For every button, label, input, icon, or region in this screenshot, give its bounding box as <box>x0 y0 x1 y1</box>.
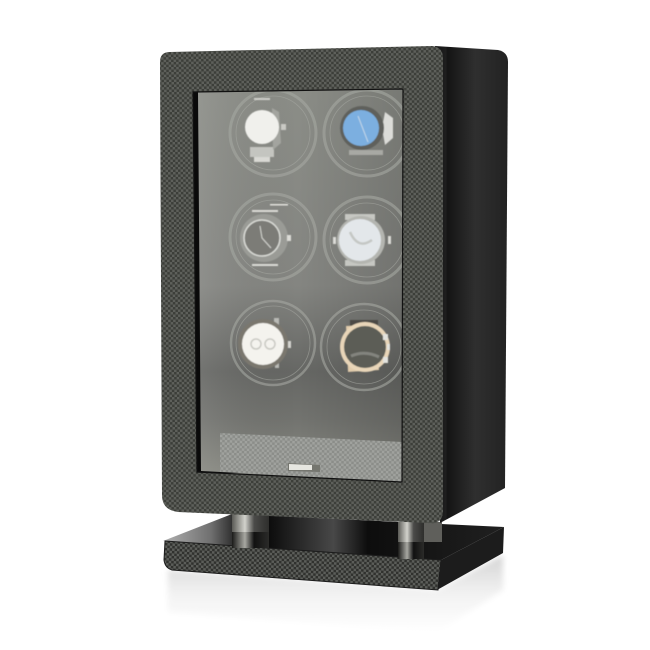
watch 4 <box>333 214 391 266</box>
carbon panel <box>220 433 403 482</box>
watch 3 <box>240 204 291 266</box>
cabinet side <box>435 46 508 523</box>
glass door <box>192 89 410 482</box>
watch 1 <box>245 98 286 162</box>
base top surface <box>163 514 504 560</box>
door shadow edge <box>192 92 240 473</box>
floor reflection <box>168 555 503 632</box>
left post <box>232 512 269 548</box>
illustration: six-watch winder cabinet <box>160 46 508 608</box>
glass outline <box>193 89 403 482</box>
winder rings <box>230 90 410 390</box>
base side <box>437 527 504 590</box>
cabinet front frame <box>160 46 443 523</box>
watch 6 <box>340 320 390 372</box>
base <box>163 514 504 590</box>
base carbon front <box>164 541 441 590</box>
watch 2 <box>340 106 393 155</box>
glass panel <box>193 89 403 482</box>
right post <box>398 522 442 559</box>
door handle <box>288 463 320 472</box>
watch 5 <box>238 318 291 369</box>
